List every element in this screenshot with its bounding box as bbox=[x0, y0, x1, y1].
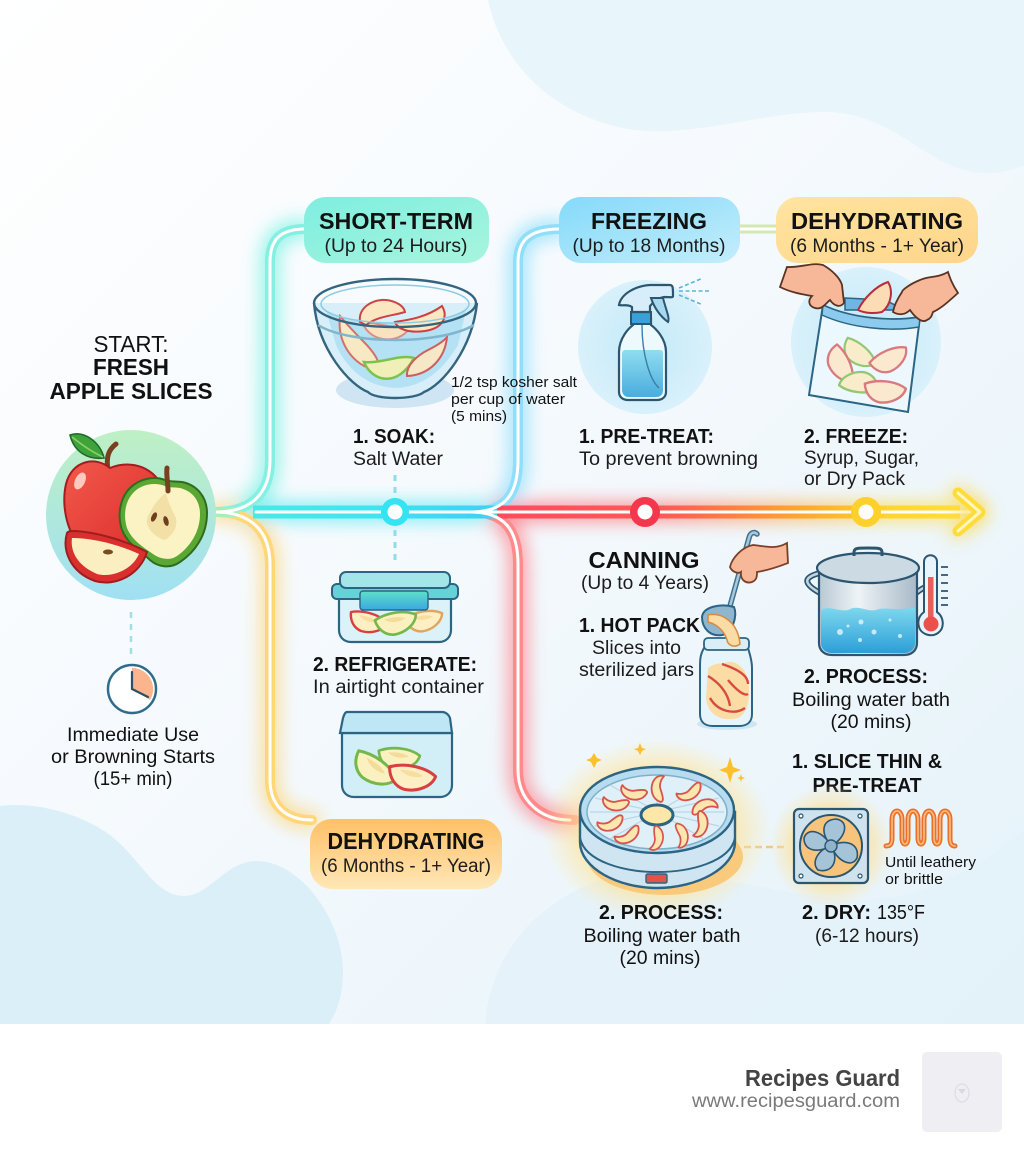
pill: short-term: SHORT-TERM bbox=[319, 208, 473, 234]
dashed connector: dehydrator to fan bbox=[744, 846, 785, 848]
footer brand: www.recipesguard.com bbox=[691, 1091, 900, 1112]
text: immediate use: (15+ min) bbox=[94, 769, 172, 790]
text: process boiling: 2. PROCESS: bbox=[804, 666, 928, 688]
text: hot pack: sterilized jars bbox=[579, 660, 694, 681]
text: soak: Salt Water bbox=[353, 449, 444, 470]
pill: dehydrating top bbox=[776, 197, 978, 263]
background blob: bottom left bbox=[0, 805, 343, 1024]
text: pre-treat bbox=[579, 426, 758, 470]
text: hot pack: 1. HOT PACK bbox=[579, 615, 701, 637]
icon: spray bottle bbox=[578, 278, 712, 414]
pill: dehydrating bottom bbox=[310, 819, 502, 889]
start heading bbox=[50, 331, 212, 404]
text: pre-treat: 1. PRE-TREAT: bbox=[579, 426, 714, 448]
pill: freezing bbox=[559, 197, 740, 263]
icon: open container with slices bbox=[340, 712, 452, 797]
text: process boiling: (20 mins) bbox=[830, 712, 912, 733]
pill: short-term: (Up to 24 Hours) bbox=[324, 236, 468, 257]
text: pre-treat: To prevent browning bbox=[579, 449, 758, 470]
icon: dehydrator bbox=[542, 738, 772, 922]
text: until leathery: or brittle bbox=[885, 871, 943, 888]
flow lines bbox=[215, 229, 975, 820]
pill: dehydrating top: (6 Months - 1+ Year) bbox=[790, 236, 964, 257]
text: slice thin bbox=[792, 751, 942, 797]
footer logo bbox=[922, 1052, 1002, 1132]
text: dry: 135°F bbox=[877, 902, 925, 924]
heading: canning: (Up to 4 Years) bbox=[581, 573, 709, 594]
text: freeze: 2. FREEZE: bbox=[804, 426, 908, 448]
text: slice thin: PRE-TREAT bbox=[812, 775, 922, 797]
text: soak: 1. SOAK: bbox=[353, 426, 435, 448]
footer brand bbox=[691, 1065, 900, 1112]
icon: clock bbox=[108, 665, 156, 713]
text: immediate use: or Browning Starts bbox=[51, 747, 215, 768]
text: process boiling: Boiling water bath bbox=[792, 690, 950, 711]
text: hot pack: Slices into bbox=[592, 638, 681, 659]
text: process dehydrator: Boiling water bath bbox=[584, 926, 740, 947]
background blob: top right bbox=[488, 0, 1024, 173]
pill: dehydrating top: DEHYDRATING bbox=[791, 208, 963, 234]
text: process dehydrator bbox=[584, 902, 740, 969]
icon: glass bowl with apple slices bbox=[314, 279, 477, 408]
text: immediate use bbox=[51, 725, 215, 790]
text: freeze: or Dry Pack bbox=[804, 469, 905, 490]
icon: lidded container with slices bbox=[332, 572, 458, 642]
pill: dehydrating bottom: (6 Months - 1+ Year) bbox=[321, 856, 491, 877]
heading: canning: CANNING bbox=[588, 547, 700, 573]
text: refrigerate: 2. REFRIGERATE: bbox=[313, 654, 477, 676]
text: freeze bbox=[804, 426, 919, 490]
text: dry: 2. DRY: bbox=[802, 902, 871, 924]
text: until leathery: Until leathery bbox=[885, 854, 977, 871]
timeline node: cyan bbox=[381, 498, 409, 526]
background blob: bottom right bbox=[485, 830, 1024, 1024]
icon: pot with thermometer bbox=[807, 548, 948, 655]
dashed connector: apple to clock bbox=[130, 612, 132, 656]
text: process dehydrator: 2. PROCESS: bbox=[599, 902, 723, 924]
icon: apples bbox=[46, 430, 216, 600]
footer bbox=[0, 1024, 1024, 1154]
pill: dehydrating bottom: DEHYDRATING bbox=[328, 828, 484, 854]
pill: freezing: (Up to 18 Months) bbox=[572, 236, 726, 257]
heading: canning bbox=[581, 547, 709, 594]
arrow: main timeline head bbox=[958, 493, 980, 531]
footer brand: Recipes Guard bbox=[745, 1065, 900, 1091]
icon: heating coil bbox=[886, 811, 955, 846]
icon: fan bbox=[769, 784, 893, 908]
white line cores bbox=[215, 229, 970, 820]
text: process boiling bbox=[792, 666, 950, 733]
text: immediate use: Immediate Use bbox=[67, 725, 199, 746]
text: hot pack bbox=[579, 615, 701, 681]
icon: ladle, hand and jar bbox=[697, 533, 788, 730]
icon: freezer bag with hands bbox=[780, 264, 958, 417]
text: freeze: Syrup, Sugar, bbox=[804, 448, 919, 469]
pill: freezing: FREEZING bbox=[591, 208, 707, 234]
timeline node: yellow bbox=[851, 497, 881, 527]
text: soak note: 1/2 tsp kosher salt bbox=[451, 375, 577, 391]
text: dry: (6-12 hours) bbox=[815, 926, 919, 947]
text: until leathery bbox=[885, 854, 977, 888]
text: soak note: per cup of water bbox=[451, 392, 565, 408]
text: refrigerate: In airtight container bbox=[313, 677, 485, 698]
text: dry bbox=[802, 902, 925, 947]
dashed connector: soak to refrigerate bbox=[394, 475, 396, 566]
start heading: START: bbox=[94, 331, 168, 357]
text: soak bbox=[353, 426, 444, 470]
text: process dehydrator: (20 mins) bbox=[620, 948, 700, 969]
pill: short-term bbox=[304, 197, 489, 263]
start heading: FRESH bbox=[93, 354, 169, 380]
text: soak note: (5 mins) bbox=[451, 409, 507, 425]
start heading: APPLE SLICES bbox=[50, 378, 212, 404]
timeline node: red bbox=[630, 497, 660, 527]
text: soak note bbox=[451, 375, 577, 425]
text: slice thin: 1. SLICE THIN & bbox=[792, 751, 942, 773]
text: refrigerate bbox=[313, 654, 485, 698]
